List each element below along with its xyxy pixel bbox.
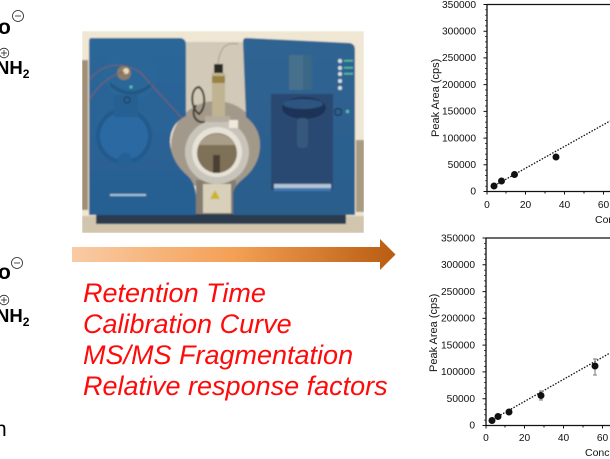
chemical structure fragments	[0, 10, 30, 441]
photo: mass spectrometer	[82, 31, 364, 233]
x axis tick labels: 0	[484, 200, 490, 211]
text block: measured parameters	[83, 278, 388, 401]
x axis tick labels: 20	[520, 200, 531, 211]
data points	[488, 362, 598, 424]
x axis tick labels	[484, 200, 609, 211]
y axis tick labels: 250000	[441, 287, 475, 298]
x axis tick labels: 20	[519, 433, 530, 444]
ion source ring	[185, 120, 249, 184]
trend line	[490, 353, 610, 421]
y axis tick labels: 100000	[442, 134, 476, 144]
x axis tick labels: 40	[558, 433, 569, 444]
text block: measured parameters: Retention Time	[83, 278, 266, 308]
text block: measured parameters: Relative response factors	[83, 371, 388, 401]
x axis title: Conc	[585, 447, 610, 459]
y axis tick labels	[441, 234, 475, 432]
label: oxygen anion bottom	[0, 258, 22, 284]
label: ammonium top	[0, 48, 30, 81]
y axis tick labels: 50000	[448, 160, 476, 171]
chart: calibration curve top	[430, 0, 610, 226]
error bars	[539, 359, 597, 400]
y axis tick labels: 0	[470, 186, 476, 198]
y axis tick labels: 150000	[442, 106, 476, 118]
y axis tick labels: 0	[469, 420, 475, 432]
base	[96, 213, 346, 224]
label: oxygen anion top	[0, 10, 24, 39]
y axis tick labels: 300000	[442, 26, 476, 38]
y axis tick labels: 200000	[442, 80, 476, 91]
x axis tick labels: 60	[598, 200, 609, 211]
axes	[484, 4, 610, 194]
y axis tick labels: 350000	[442, 0, 476, 11]
trend line	[492, 121, 610, 187]
grey source housing	[171, 101, 261, 191]
syringe	[212, 73, 225, 118]
x axis tick labels: 60	[597, 433, 608, 444]
x axis tick labels	[483, 433, 608, 444]
y axis tick labels: 150000	[441, 340, 475, 352]
axes	[482, 238, 610, 428]
y axis tick labels: 300000	[441, 260, 475, 271]
y axis tick labels: 100000	[441, 367, 475, 378]
y axis tick labels: 50000	[447, 394, 475, 405]
y axis tick labels: 250000	[442, 53, 476, 64]
x axis tick labels: 0	[483, 433, 489, 444]
coils	[192, 87, 204, 114]
y axis tick labels: 200000	[441, 314, 475, 324]
label: ammonium bottom	[0, 295, 30, 329]
y axis tick labels	[442, 0, 476, 198]
x axis tick labels: 40	[559, 200, 570, 211]
y axis title: Peak Area (cps)	[430, 59, 442, 137]
chart: calibration curve bottom	[428, 234, 610, 459]
label: ammonium bottom: 2	[23, 315, 30, 329]
text block: measured parameters: Calibration Curve	[83, 309, 292, 339]
text block: measured parameters: MS/MS Fragmentation	[83, 340, 353, 370]
label: ammonium top: 2	[23, 67, 30, 81]
y axis tick labels: 350000	[441, 234, 475, 244]
left blue panel	[89, 38, 196, 215]
data points	[490, 154, 560, 190]
arrow: gradient process arrow	[72, 239, 396, 270]
right blue panel	[233, 38, 355, 215]
y axis title: Peak Area (cps)	[428, 294, 440, 372]
